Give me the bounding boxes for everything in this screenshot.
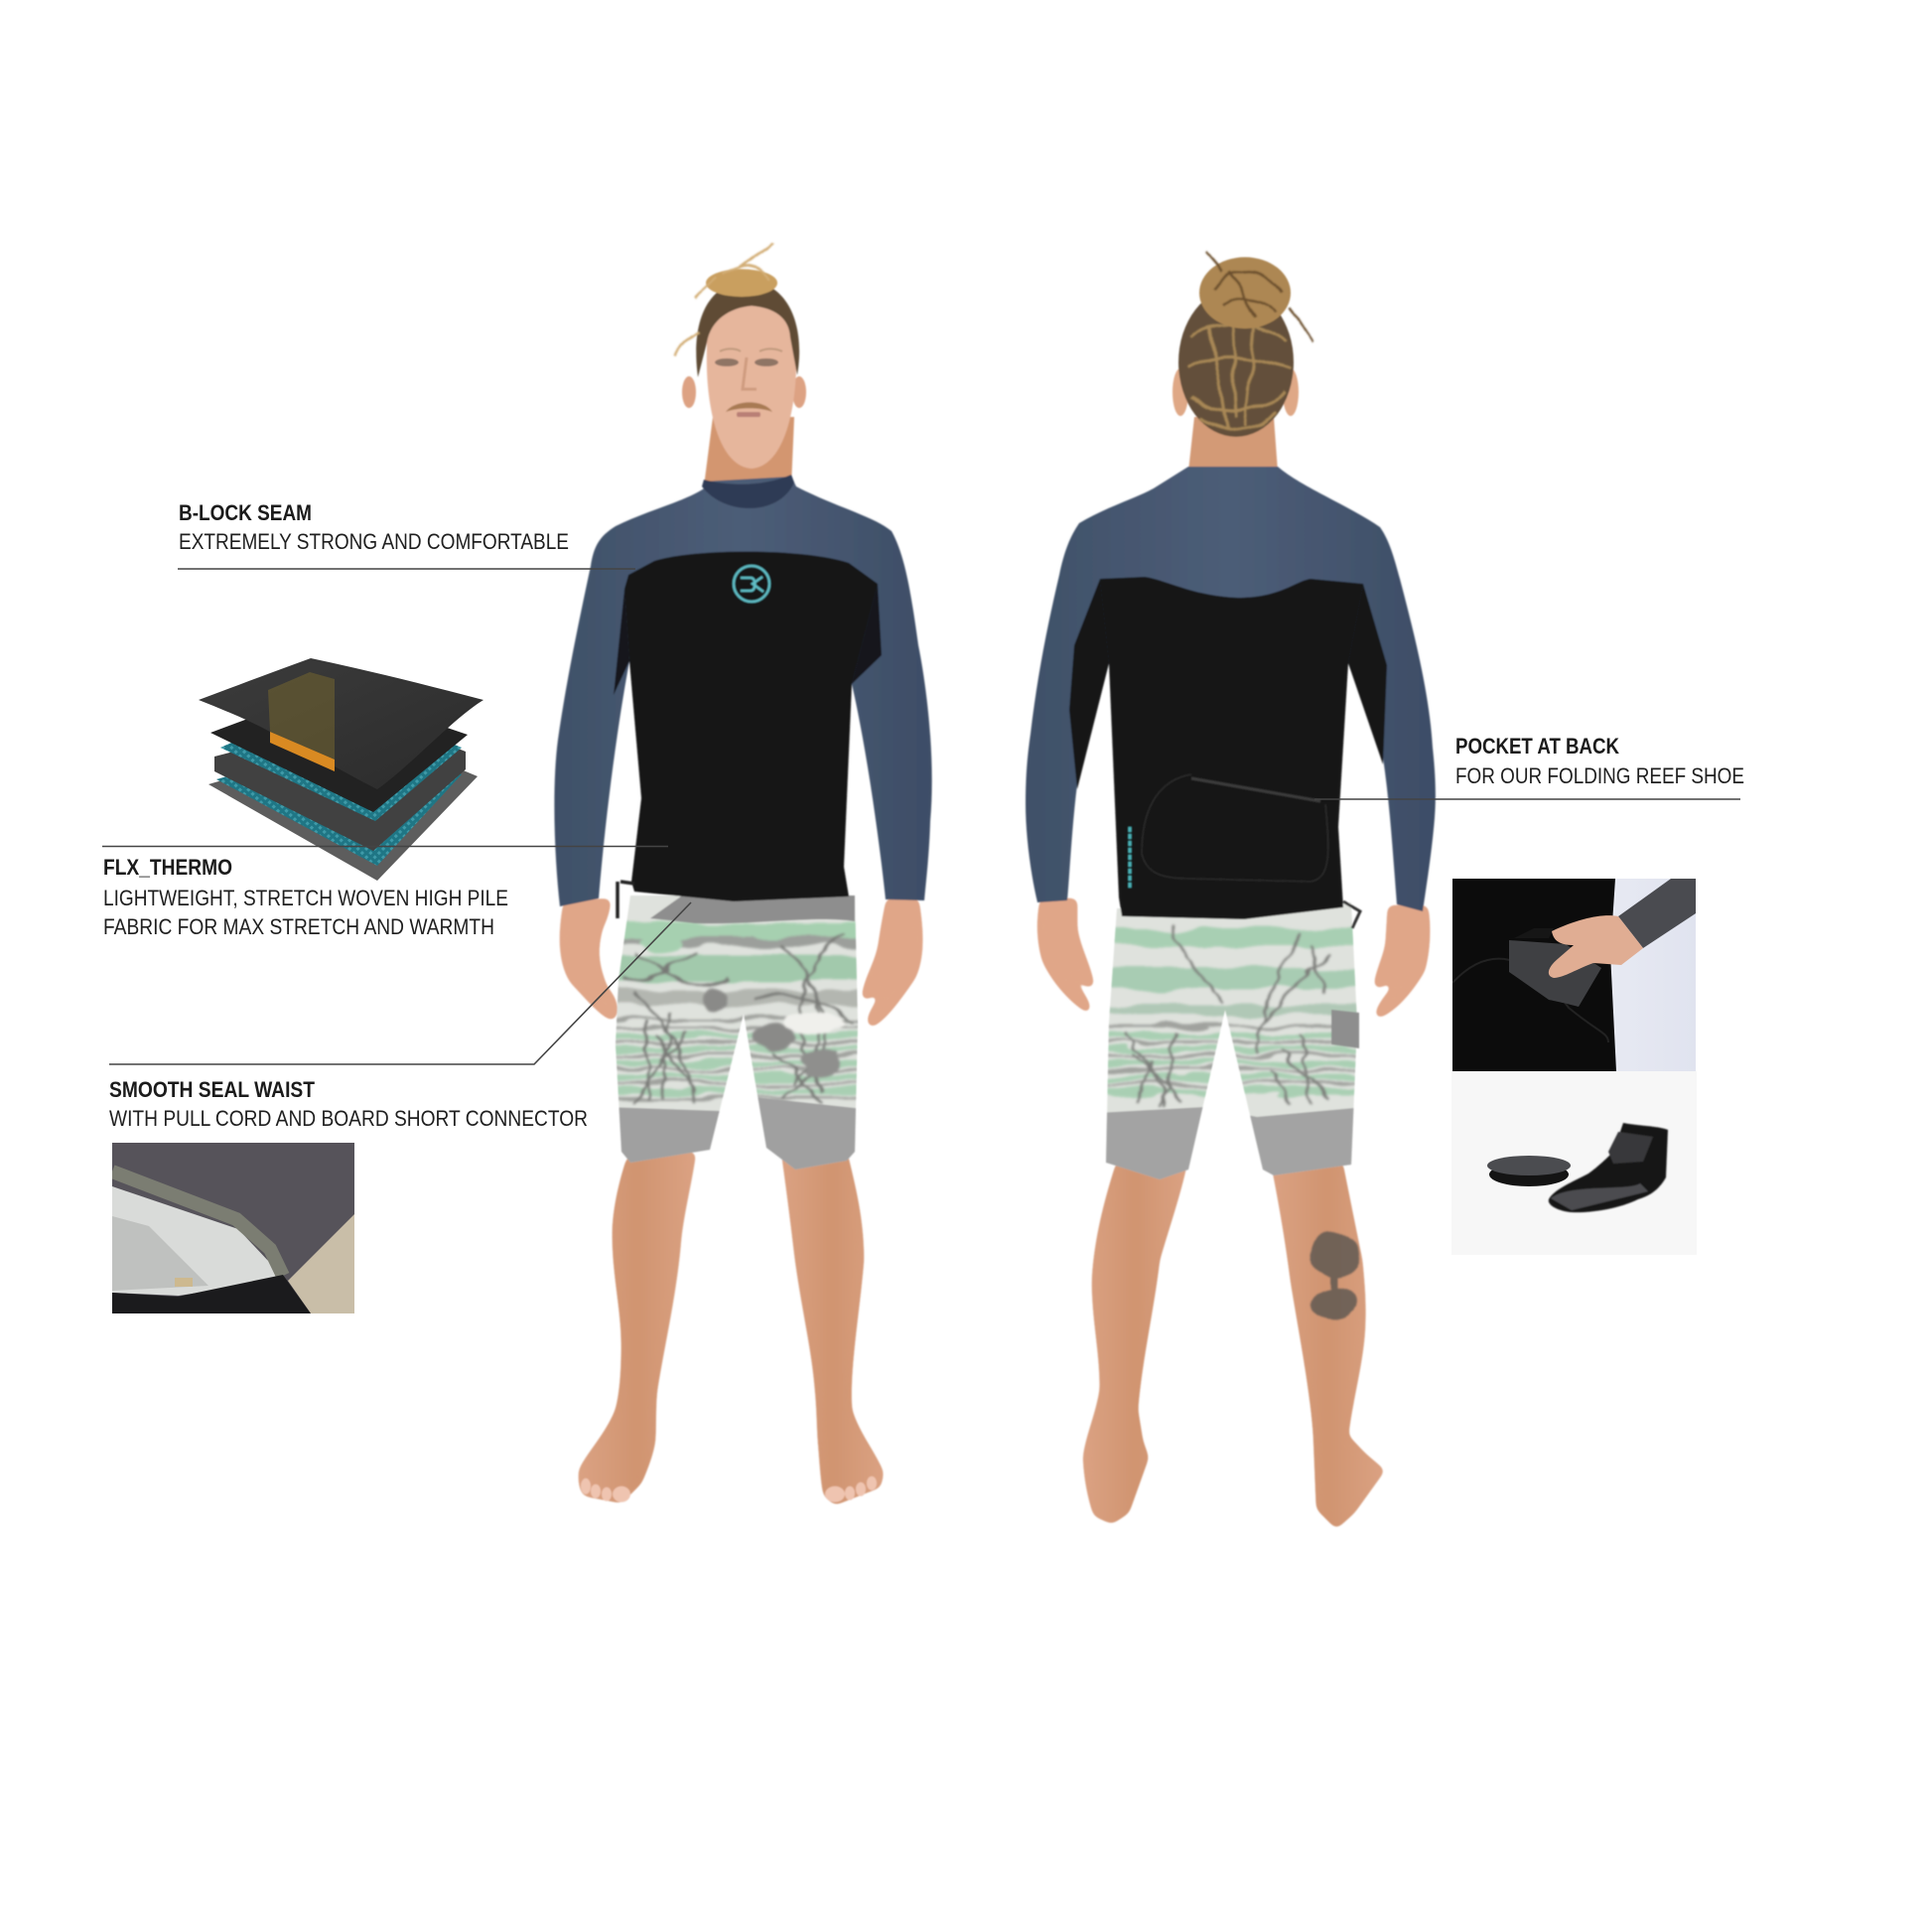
callout: smooth seal waist <box>109 902 691 1131</box>
photo: waist seal detail <box>112 1143 354 1313</box>
callout: flx thermo <box>102 846 668 939</box>
callout: flx thermo: FABRIC FOR MAX STRETCH AND WARMTH <box>103 914 494 939</box>
callout: smooth seal waist: SMOOTH SEAL WAIST <box>109 1077 315 1102</box>
callout: pocket at back: FOR OUR FOLDING REEF SHOE <box>1455 763 1744 788</box>
front torso <box>624 551 878 901</box>
icon: fabric layers <box>199 658 483 881</box>
back sleeves and yoke <box>1026 467 1436 911</box>
icon: tree tattoo <box>1309 1233 1360 1319</box>
front neck and head <box>675 243 806 486</box>
underarm shadow panels <box>614 584 882 695</box>
back shorts <box>1105 902 1358 1179</box>
front sleeves and yoke <box>554 477 932 906</box>
back torso <box>1100 577 1363 919</box>
callout: pocket at back <box>1314 734 1744 799</box>
front model <box>554 243 932 1505</box>
front legs <box>579 1152 884 1505</box>
icon: reef shoe <box>1549 1123 1668 1212</box>
front toes <box>581 1476 877 1502</box>
back shorts pocket <box>1331 1010 1359 1048</box>
front shorts <box>615 894 859 1170</box>
callout: smooth seal waist: WITH PULL CORD AND BOARD SHORT CONNECTOR <box>109 1106 588 1131</box>
back model <box>1026 253 1436 1529</box>
pull cord back <box>1343 901 1360 928</box>
callout: flx thermo: LIGHTWEIGHT, STRETCH WOVEN HIGH PILE <box>103 886 508 910</box>
photo: folding reef shoes <box>1451 1071 1697 1255</box>
callout: b-lock seam: B-LOCK SEAM <box>179 500 312 525</box>
back legs <box>1083 1162 1385 1529</box>
underarm panels <box>1069 579 1387 789</box>
back pocket and zipper <box>1130 774 1328 889</box>
photo: hand in pocket <box>1452 879 1696 1071</box>
callout: b-lock seam: EXTREMELY STRONG AND COMFORTABLE <box>179 529 569 554</box>
callout: pocket at back: POCKET AT BACK <box>1455 734 1619 759</box>
icon: folded shoe <box>1487 1156 1571 1186</box>
pull cord <box>618 882 634 918</box>
back hands <box>1037 898 1430 1019</box>
callout: b-lock seam <box>178 500 635 569</box>
back head and hair <box>1173 253 1312 472</box>
front hands <box>560 898 922 1028</box>
front chest logo <box>734 566 769 602</box>
callout: flx thermo: FLX_THERMO <box>103 855 232 880</box>
